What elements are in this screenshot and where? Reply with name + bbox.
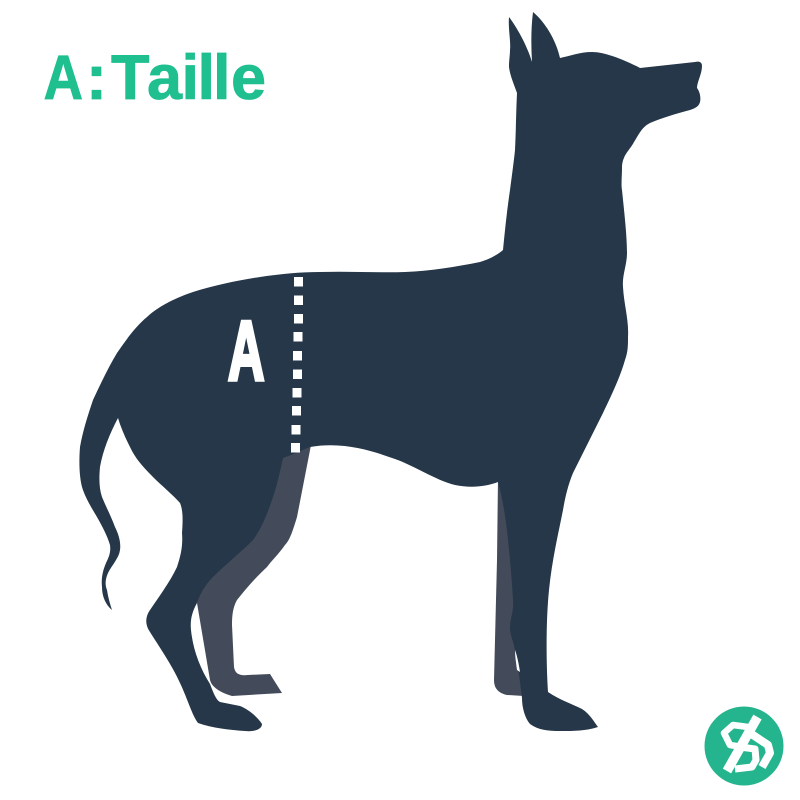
far front leg (494, 478, 524, 696)
white sliver between front legs (515, 650, 520, 672)
title: A (44, 42, 83, 113)
near body silhouette (79, 12, 702, 731)
dog illustration (79, 12, 702, 731)
title: :Taille (86, 43, 266, 113)
measure label A: A (228, 304, 264, 398)
logo badge (704, 706, 784, 786)
dashed measure line A (291, 277, 303, 452)
far hind leg (197, 445, 311, 696)
